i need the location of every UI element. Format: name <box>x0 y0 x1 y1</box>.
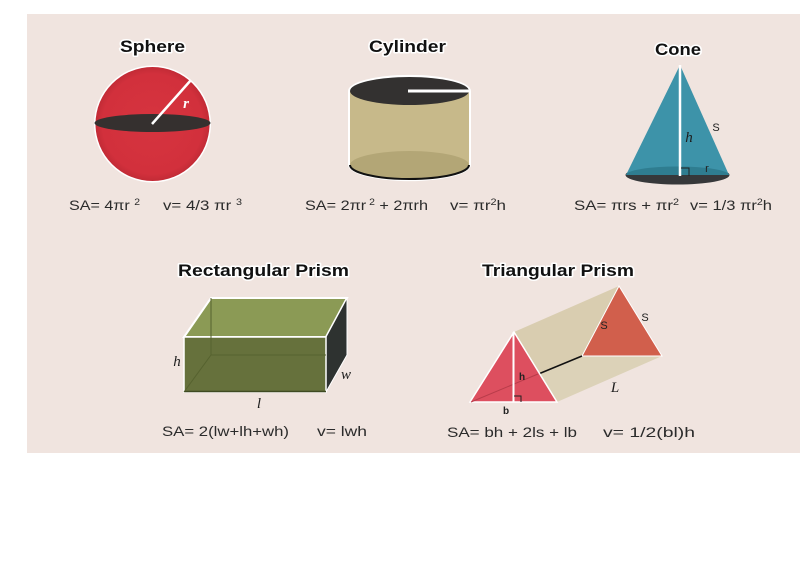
formula: cylinder volume: v= πr <box>450 197 483 213</box>
icon: triangular prism shape: b <box>503 406 509 417</box>
formula: sphere volume: v= 4/3 πr <box>163 197 220 213</box>
icon: rectangular prism shape: w <box>341 367 351 383</box>
background panel <box>27 14 800 453</box>
panel: cylinder <box>305 37 506 213</box>
formula: cylinder volume: 2 <box>490 197 497 207</box>
formula: cylinder surface area: + 2πrh <box>375 197 428 213</box>
heading: cylinder: Cylinder <box>369 37 446 56</box>
formula: cone volume: h <box>763 197 772 213</box>
icon: triangular prism shape: S <box>600 320 608 332</box>
formula: rectangular prism volume: v= lwh <box>317 423 367 439</box>
icon: sphere shape: r <box>183 96 189 112</box>
panel: triangular prism <box>447 261 695 440</box>
formula: sphere surface area: SA= 4πr <box>69 197 122 213</box>
panel: rectangular prism <box>162 261 367 439</box>
icon: triangular prism shape: L <box>610 380 619 396</box>
icon: rectangular prism shape <box>173 298 351 412</box>
formula: cone surface area: SA= πrs + πr <box>574 197 656 213</box>
icon: triangular prism shape: S <box>641 312 649 324</box>
heading: sphere: Sphere <box>120 37 185 56</box>
heading: triangular prism: Triangular Prism <box>482 261 634 280</box>
formula: cone surface area: 2 <box>673 197 679 207</box>
formula: sphere volume: 3 <box>236 197 242 207</box>
icon: rectangular prism shape: h <box>173 354 181 370</box>
formula: triangular prism volume: v= 1/2(bl)h <box>603 424 695 440</box>
icon: cone shape <box>626 65 730 184</box>
icon: cylinder shape <box>348 75 471 181</box>
icon: cone shape: h <box>685 130 693 146</box>
heading: cone: Cone <box>655 40 701 59</box>
icon: rectangular prism shape: l <box>257 396 261 412</box>
formula: sphere surface area: 2 <box>134 197 140 207</box>
icon: sphere shape <box>94 66 211 182</box>
formula: cylinder surface area: SA= 2πr <box>305 197 358 213</box>
icon: triangular prism shape: h <box>519 372 525 383</box>
formula: cylinder volume: h <box>497 197 506 213</box>
formula: cone volume: 2 <box>757 197 763 207</box>
icon: triangular prism shape <box>470 286 662 417</box>
formula: triangular prism surface area: SA= bh + 2ls + lb <box>447 424 577 440</box>
formula: cylinder surface area: 2 <box>366 197 375 207</box>
icon: cone shape: r <box>705 163 709 175</box>
icon: cone shape: S <box>712 122 720 134</box>
panel: sphere <box>69 37 242 213</box>
heading: rectangular prism: Rectangular Prism <box>178 261 349 280</box>
formula: rectangular prism surface area: SA= 2(lw+lh+wh) <box>162 423 289 439</box>
panel: cone <box>574 40 772 213</box>
formula: cone volume: v= 1/3 πr <box>690 197 747 213</box>
